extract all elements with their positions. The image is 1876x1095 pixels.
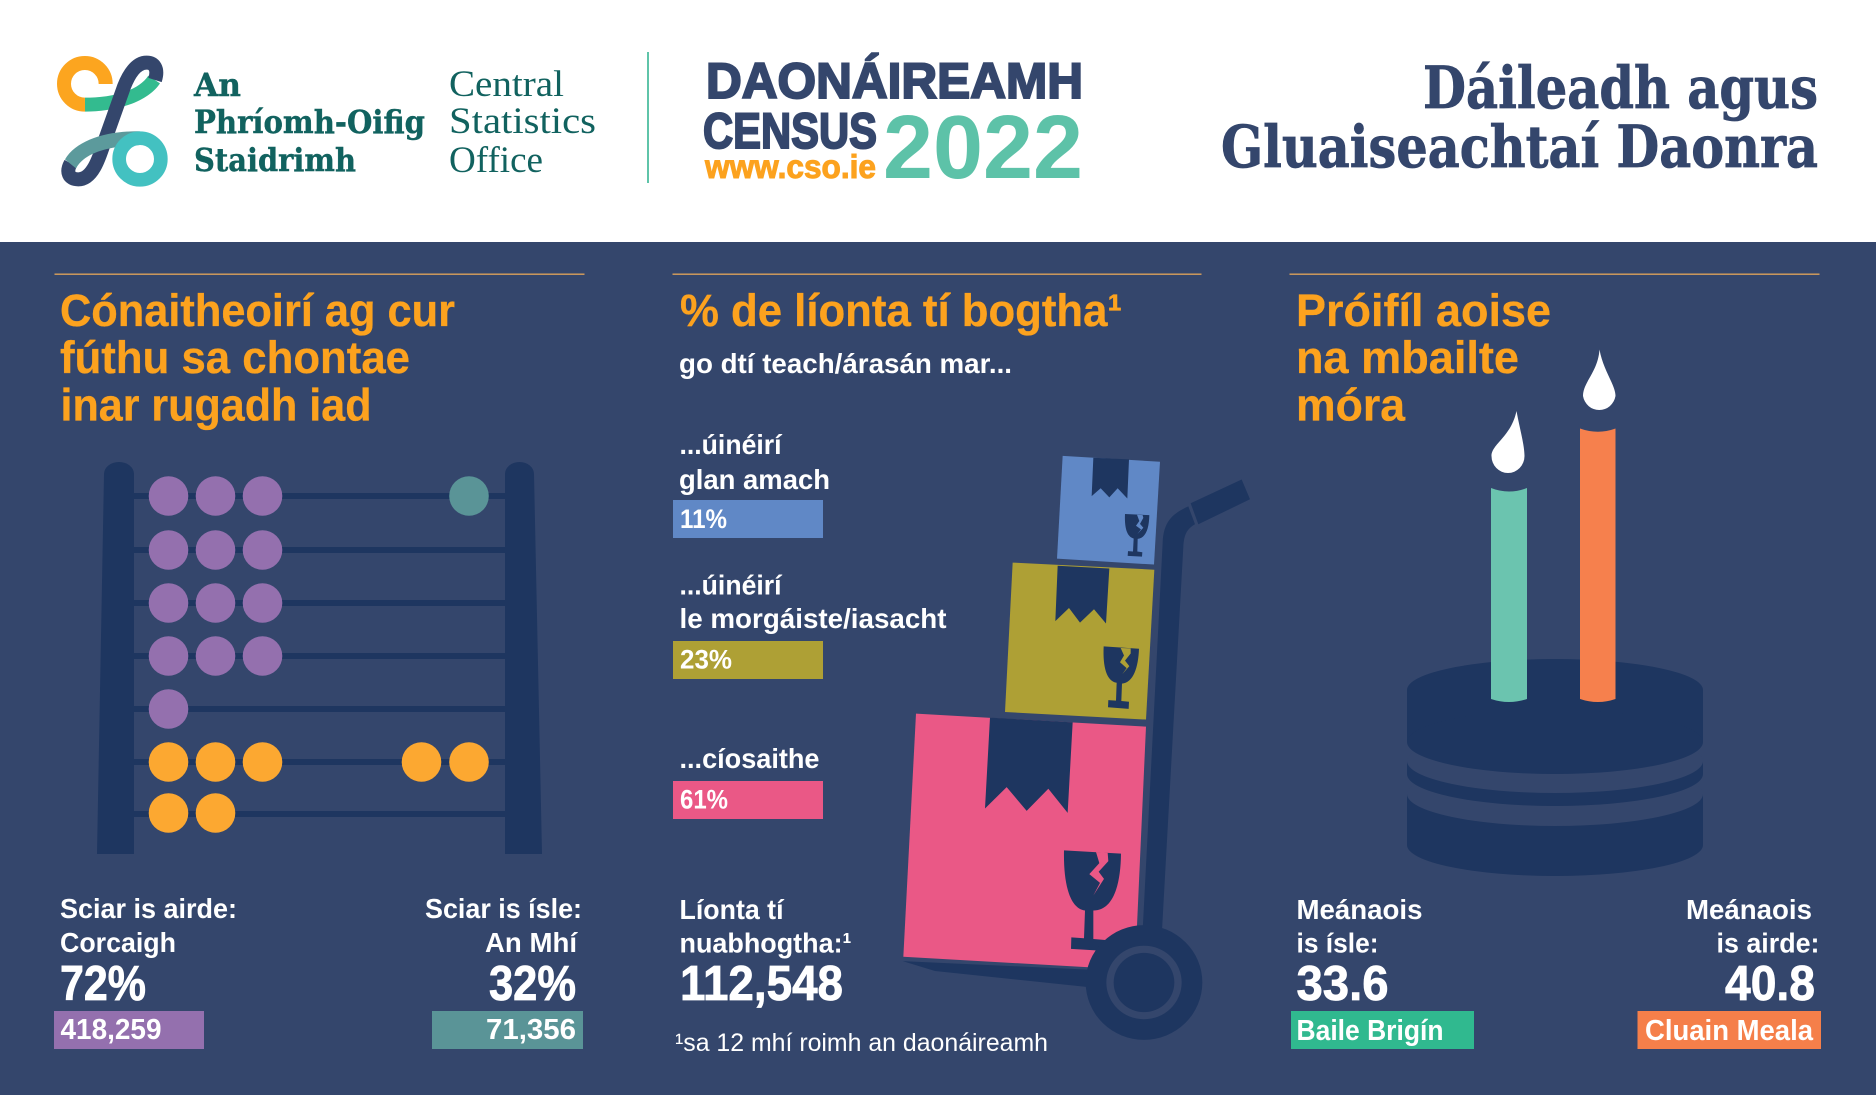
subheading: go dtí teach/árasán mar... xyxy=(679,348,1012,379)
bar: owners outright: glan amach xyxy=(679,464,830,495)
bar: renters xyxy=(673,743,823,819)
stat: lowest share: Sciar is ísle: xyxy=(425,893,582,924)
stat: highest mean age: is airde: xyxy=(1716,928,1820,958)
stat: highest share: Sciar is airde: xyxy=(60,893,237,924)
panel: county of birth xyxy=(54,274,584,1049)
stat: lowest share: 32% xyxy=(489,957,576,1011)
census logo: www.cso.ie xyxy=(704,148,876,185)
logo text: English name: Statistics xyxy=(449,101,596,142)
stat: newly moved households: nuabhogtha:¹ xyxy=(680,928,852,958)
heading: residents in birth county: inar rugadh iad xyxy=(60,380,372,430)
title: Dáileadh agus xyxy=(1423,54,1818,122)
bar: owners outright xyxy=(673,429,830,538)
stat: lowest share: 71,356 xyxy=(486,1014,576,1046)
bar: owners with mortgage: 23% xyxy=(680,644,732,674)
icon: hand truck with boxes xyxy=(903,456,1250,1040)
stat: lowest share xyxy=(425,893,583,1049)
bar: owners with mortgage xyxy=(673,570,946,679)
stat: highest mean age: Meánaois xyxy=(1686,894,1812,925)
census logo: 2022 xyxy=(883,98,1083,198)
title xyxy=(1221,54,1818,181)
heading: residents in birth county xyxy=(60,285,455,430)
heading: age profile of large towns: Próifíl aoise xyxy=(1296,285,1551,336)
bar: renters: ...cíosaithe xyxy=(680,743,820,774)
stat: newly moved households: 112,548 xyxy=(680,957,843,1011)
heading: residents in birth county: Cónaitheoirí ag cur xyxy=(60,285,455,336)
bar: owners with mortgage: ...úinéirí xyxy=(680,570,783,600)
icon: CSO logo mark xyxy=(64,63,161,180)
heading: age profile of large towns: na mbailte xyxy=(1296,332,1519,383)
stat: highest share: 72% xyxy=(60,957,146,1011)
heading: residents in birth county: fúthu sa chontae xyxy=(60,332,410,383)
logo text: English name xyxy=(449,64,596,181)
stat: lowest mean age: is ísle: xyxy=(1296,928,1378,958)
panel: age profile xyxy=(1290,274,1821,1049)
icon: birthday cake xyxy=(1407,659,1703,876)
chart: abacus xyxy=(97,462,542,854)
stat: highest mean age: 40.8 xyxy=(1725,957,1815,1011)
stat: highest mean age xyxy=(1638,894,1821,1049)
census logo: CENSUS xyxy=(703,103,877,159)
stat: newly moved households xyxy=(680,894,852,1011)
stat: highest share: 418,259 xyxy=(60,1014,162,1046)
logo text: English name: Central xyxy=(449,64,564,105)
logo text: Irish name: Staidrimh xyxy=(194,141,356,179)
icon: candle, youngest xyxy=(1491,411,1527,702)
icon: candle, oldest xyxy=(1580,350,1616,702)
bar: owners with mortgage: le morgáiste/iasacht xyxy=(680,603,946,634)
header band xyxy=(0,0,1876,242)
stat: newly moved households: Líonta tí xyxy=(680,894,785,925)
logo text: Irish name: An xyxy=(193,66,241,104)
stat: highest mean age: Cluain Meala xyxy=(1645,1015,1814,1047)
bar: renters: 61% xyxy=(680,784,728,814)
bar: owners outright: 11% xyxy=(680,504,727,534)
logo text: Irish name xyxy=(193,66,425,179)
heading: percent of households moved: % de líonta tí bogtha¹ xyxy=(680,285,1122,336)
logo text: Irish name: Phríomh-Oifig xyxy=(194,103,425,141)
bar: owners outright: ...úinéirí xyxy=(680,429,783,460)
logo text: English name: Office xyxy=(449,140,543,181)
census logo: DAONÁIREAMH xyxy=(706,53,1083,109)
heading: age profile of large towns xyxy=(1296,285,1551,430)
stat: lowest mean age: 33.6 xyxy=(1296,957,1388,1011)
footnote: ¹sa 12 mhí roimh an daonáireamh xyxy=(675,1029,1048,1057)
stat: lowest mean age: Meánaois xyxy=(1296,894,1422,925)
stat: highest share: Corcaigh xyxy=(60,927,176,958)
stat: lowest mean age: Baile Brigín xyxy=(1296,1015,1444,1047)
stat: lowest mean age xyxy=(1291,894,1474,1049)
stat: lowest share: An Mhí xyxy=(485,927,578,958)
heading: age profile of large towns: móra xyxy=(1296,380,1406,430)
panel: households moved xyxy=(672,274,1250,1057)
stat: highest share xyxy=(54,893,237,1049)
census logo xyxy=(703,53,1083,198)
